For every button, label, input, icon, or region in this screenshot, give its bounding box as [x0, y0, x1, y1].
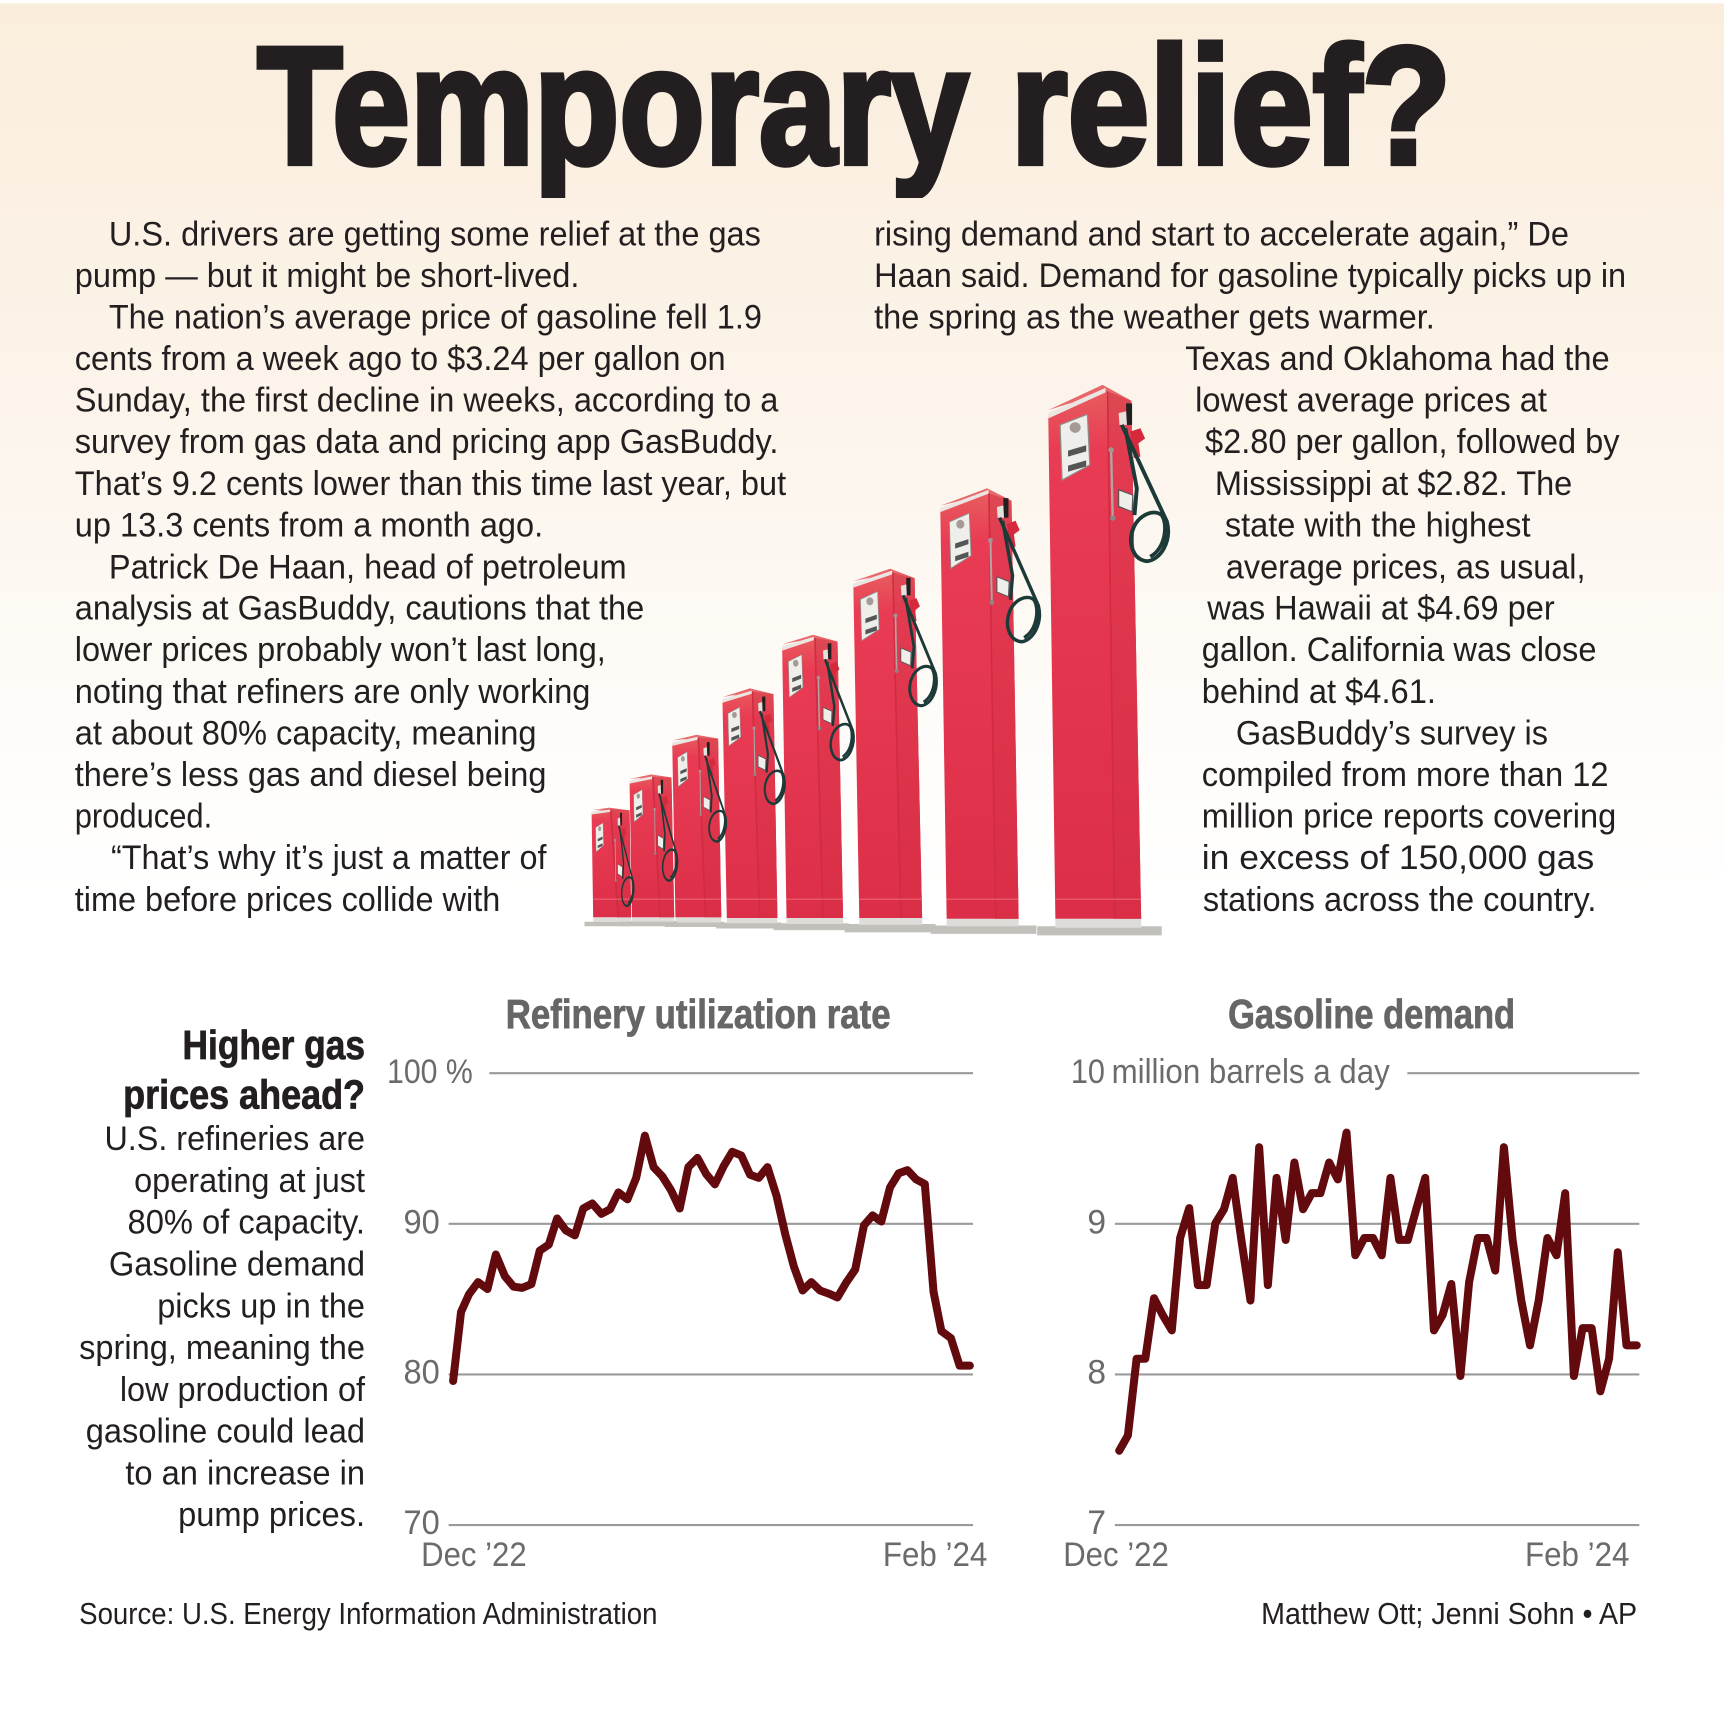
x axis labels: Dec ’22 — [421, 1536, 527, 1574]
text block: article left column: survey from gas data and pricing app GasBuddy. — [75, 423, 778, 461]
pump 1 — [584, 808, 634, 926]
sidebar text — [79, 1120, 366, 1534]
sidebar text: U.S. refineries are — [104, 1120, 365, 1158]
source note: Source: U.S. Energy Information Administration — [79, 1598, 657, 1631]
title: relief? — [1010, 13, 1451, 199]
text block: article right column: GasBuddy’s survey is — [1236, 714, 1548, 752]
text block: article left column: Sunday, the first decline in weeks, according to a — [75, 381, 778, 419]
text block: article right column: state with the highest — [1225, 507, 1531, 545]
sidebar text: pump prices. — [178, 1496, 365, 1534]
text block: article right column: Haan said. Demand for gasoline typically picks up in — [874, 257, 1626, 295]
sidebar text: low production of — [120, 1371, 366, 1409]
y axis labels — [387, 1053, 473, 1542]
pump 3 — [665, 735, 726, 927]
text block: article right column: the spring as the weather gets warmer. — [874, 298, 1435, 336]
pump 4 — [716, 688, 785, 929]
y axis labels: 100 % — [387, 1053, 473, 1091]
sidebar text: Gasoline demand — [109, 1246, 365, 1284]
chart title: Refinery utilization rate — [506, 991, 891, 1037]
y axis labels: 80 — [404, 1353, 440, 1391]
chart: refinery utilization rate — [387, 991, 987, 1574]
text block: article left column: lower prices probably won’t last long, — [75, 631, 606, 669]
sidebar heading: Higher gas — [183, 1022, 365, 1068]
text block: article right column: stations across the country. — [1203, 881, 1596, 919]
demand data line — [1119, 1133, 1637, 1451]
illustration: rising red gas pumps — [584, 385, 1168, 935]
x axis labels: Feb ’24 — [1525, 1536, 1629, 1574]
y axis labels: 90 — [404, 1204, 440, 1242]
y axis labels: 9 — [1087, 1204, 1106, 1242]
text block: article left column: there’s less gas and diesel being — [75, 756, 546, 794]
y axis labels: 7 — [1087, 1504, 1106, 1542]
text block: article left column: cents from a week ago to $3.24 per gallon on — [75, 340, 726, 378]
text block: article right column: Mississippi at $2.82. The — [1215, 465, 1572, 503]
text block: article left column: The nation’s average price of gasoline fell 1.9 — [109, 298, 762, 336]
text block: article left column: “That’s why it’s just a matter of — [111, 839, 547, 877]
sidebar: higher gas prices ahead — [79, 1022, 366, 1534]
pump 7 — [931, 488, 1039, 934]
chart title: Gasoline demand — [1228, 991, 1515, 1037]
sidebar text: spring, meaning the — [79, 1329, 365, 1367]
pump 5 — [773, 635, 854, 930]
sidebar text: to an increase in — [125, 1454, 365, 1492]
text block: article right column: rising demand and start to accelerate again,” De — [874, 215, 1569, 253]
text block: article left column: pump — but it might be short-lived. — [75, 257, 579, 295]
y axis labels: 10 — [1071, 1053, 1105, 1091]
text block: article right column: was Hawaii at $4.69 per — [1206, 590, 1555, 628]
text block: article left column: Patrick De Haan, head of petroleum — [109, 548, 627, 586]
credit: Matthew Ott; Jenni Sohn • AP — [1261, 1598, 1637, 1631]
x axis labels — [421, 1536, 987, 1574]
title — [256, 40, 1446, 198]
sidebar text: operating at just — [134, 1162, 366, 1200]
text block: article right column: lowest average prices at — [1195, 381, 1547, 419]
sidebar text: picks up in the — [157, 1287, 365, 1325]
text block: article right column: in excess of 150,000 gas — [1202, 839, 1594, 877]
text block: article left column: time before prices collide with — [75, 881, 500, 919]
text block: article right column: $2.80 per gallon, followed by — [1205, 423, 1620, 461]
sidebar text: 80% of capacity. — [128, 1204, 365, 1242]
sidebar heading: prices ahead? — [123, 1071, 365, 1117]
background gradient — [0, 3, 1724, 896]
text block: article right column: gallon. California was close — [1202, 631, 1596, 669]
text block: article right column: compiled from more than 12 — [1202, 756, 1609, 794]
text block: article left column: up 13.3 cents from a month ago. — [75, 507, 543, 545]
text block: article left column — [75, 215, 787, 919]
text block: article right column: behind at $4.61. — [1202, 673, 1436, 711]
x axis labels: Dec ’22 — [1063, 1536, 1169, 1574]
text block: article left column: U.S. drivers are getting some relief at the gas — [109, 215, 761, 253]
title: Temporary — [257, 13, 969, 199]
text block: article right column — [874, 215, 1626, 919]
pump 2 — [621, 775, 677, 926]
y axis labels: 70 — [404, 1504, 440, 1542]
x axis labels: Feb ’24 — [883, 1536, 987, 1574]
text block: article left column: That’s 9.2 cents lower than this time last year, but — [75, 465, 787, 503]
pump 6 — [845, 569, 936, 932]
text block: article right column: Texas and Oklahoma had the — [1185, 340, 1610, 378]
y axis labels — [1071, 1053, 1390, 1542]
text block: article right column: million price reports covering — [1202, 797, 1616, 835]
x axis labels — [1063, 1536, 1629, 1574]
text block: article right column: average prices, as usual, — [1226, 548, 1585, 586]
refinery data line — [453, 1136, 970, 1381]
text block: article left column: noting that refiners are only working — [75, 673, 590, 711]
sidebar text: gasoline could lead — [86, 1413, 365, 1451]
chart: gasoline demand — [1063, 991, 1639, 1574]
sidebar heading — [123, 1022, 365, 1117]
text block: article left column: analysis at GasBuddy, cautions that the — [75, 590, 644, 628]
text block: article left column: at about 80% capacity, meaning — [75, 714, 537, 752]
y axis labels: 8 — [1087, 1353, 1106, 1391]
y axis labels: million barrels a day — [1112, 1053, 1390, 1091]
pump 8 — [1037, 385, 1168, 935]
text block: article left column: produced. — [75, 797, 212, 835]
